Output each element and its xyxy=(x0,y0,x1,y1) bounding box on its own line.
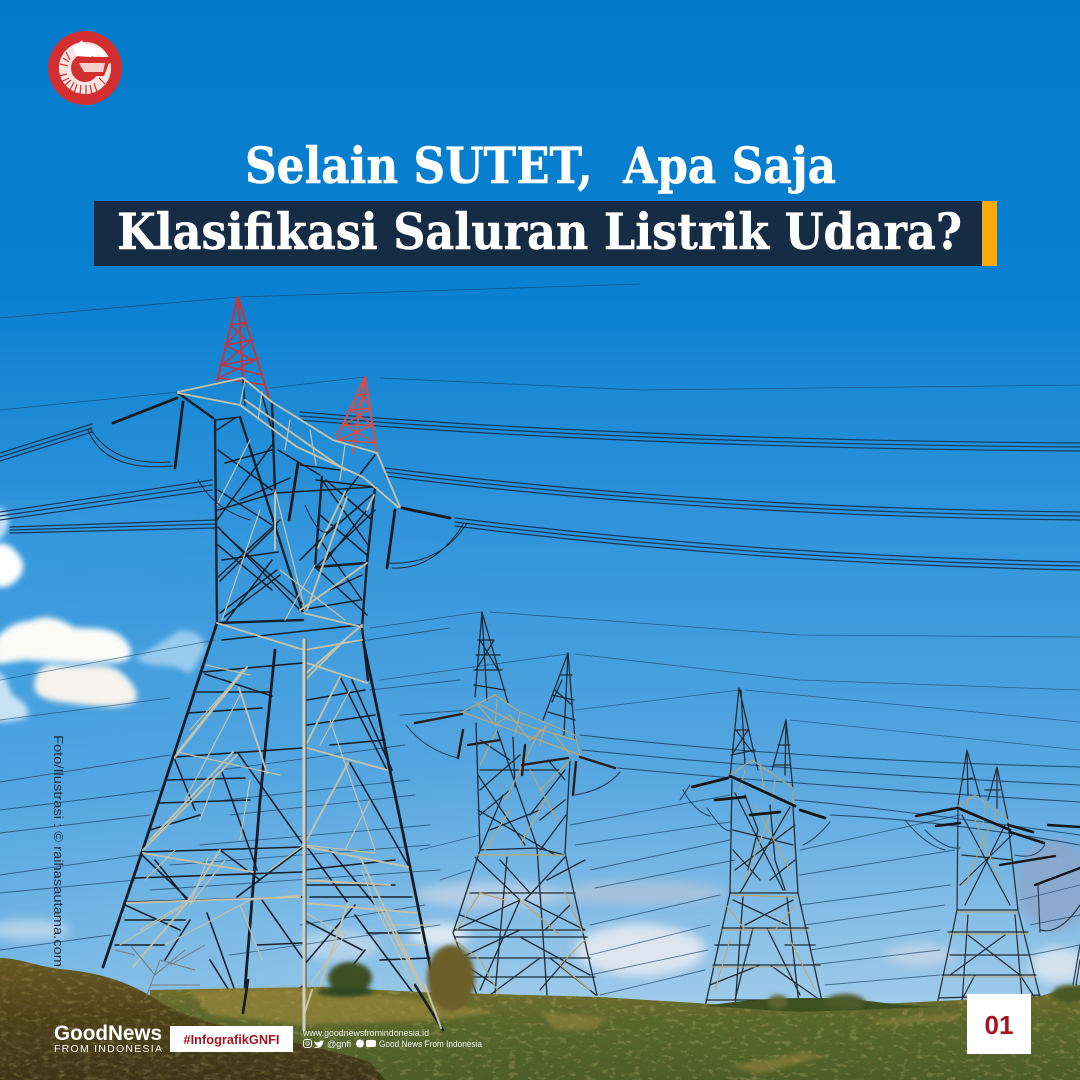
website and social handles: Good News From Indonesia xyxy=(379,1039,482,1049)
lower dark lattice xyxy=(115,663,443,1033)
tower 2 xyxy=(406,612,620,995)
power lines xyxy=(0,284,1080,995)
hashtag box: #InfografikGNFI xyxy=(184,1033,280,1047)
red peaks xyxy=(217,297,377,453)
logo centre xyxy=(78,60,109,76)
tower 1 base over ground xyxy=(243,980,443,1030)
ground and vegetation xyxy=(0,945,1080,1080)
insulators and jumpers xyxy=(113,398,450,568)
clouds xyxy=(0,507,1080,983)
orange accent xyxy=(982,201,997,266)
logo xyxy=(48,31,122,105)
photo credit: Foto/Ilustrasi : © raihasautama.com xyxy=(51,735,65,967)
brand: GoodNews From Indonesia: GoodNews xyxy=(54,1022,162,1045)
main dark legs xyxy=(178,393,375,680)
icon: instagram xyxy=(304,1040,312,1048)
tower 1 (foreground) xyxy=(88,297,467,1033)
icon: twitter xyxy=(314,1040,324,1048)
logo ring xyxy=(65,48,105,88)
tower 3 xyxy=(680,688,830,1015)
logo eagle head xyxy=(74,40,107,58)
page number xyxy=(967,994,1031,1054)
hashtag box xyxy=(170,1026,293,1052)
tower 4 xyxy=(905,750,1045,1005)
website and social handles: @gnfi xyxy=(327,1039,351,1049)
icon: youtube xyxy=(366,1040,376,1047)
central mast xyxy=(302,640,306,1030)
brand: GoodNews From Indonesia xyxy=(54,1022,162,1055)
right-edge tower fragments xyxy=(1000,825,1080,985)
website and social handles: www.goodnewsfromindonesia.id xyxy=(302,1028,429,1038)
steel light members xyxy=(127,378,443,1030)
upper dark lattice xyxy=(215,378,375,640)
website and social handles xyxy=(302,1028,482,1049)
icon: facebook xyxy=(356,1040,364,1048)
page number: 01 xyxy=(985,1010,1013,1040)
title line 1: Selain SUTET, Apa Saja xyxy=(245,136,836,195)
title line 2: Klasifikasi Saluran Listrik Udara? xyxy=(117,202,962,261)
title bar xyxy=(94,201,997,266)
brand: GoodNews From Indonesia: FROM INDONESIA xyxy=(54,1043,162,1055)
